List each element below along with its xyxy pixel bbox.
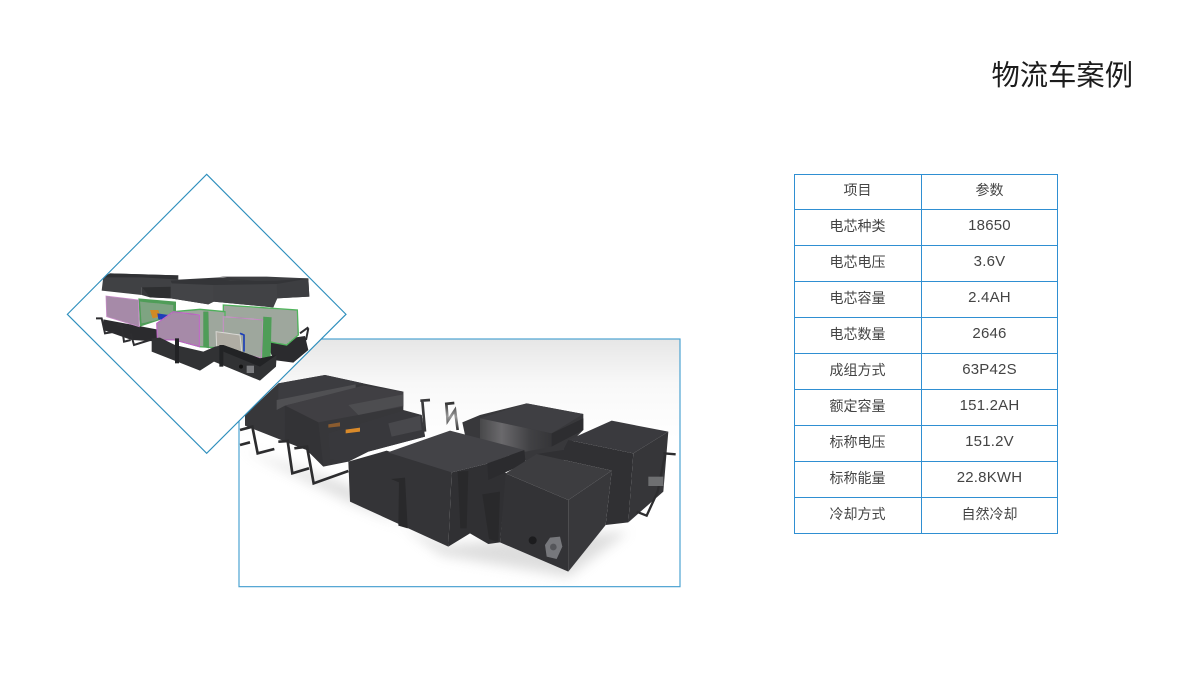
straps: [392, 478, 500, 542]
specification table: 标称电压: [830, 434, 886, 450]
photo: assembled battery packs: [239, 339, 680, 587]
left pack group: [240, 375, 458, 483]
specification table: 2646: [972, 325, 1007, 342]
specification table: [794, 174, 1058, 534]
title: 物流车案例: [992, 59, 1133, 91]
cell boards: [106, 296, 298, 358]
rear base and brackets: [96, 318, 308, 363]
specification table: 参数: [976, 182, 1004, 198]
specification table: 电芯种类: [830, 218, 886, 234]
specification table: 63P42S: [962, 361, 1017, 378]
connector: [529, 536, 537, 544]
specification table: 2.4AH: [968, 289, 1011, 306]
brackets: [240, 427, 348, 483]
specification table: 自然冷却: [962, 506, 1018, 522]
specification table: 标称能量: [830, 470, 886, 486]
specification table: 151.2AH: [960, 397, 1019, 414]
specification table: 冷却方式: [830, 506, 886, 522]
specification table: 电芯容量: [830, 290, 886, 306]
top lids: [102, 273, 309, 307]
diamond inset: exploded battery view: [67, 174, 346, 453]
specification table: 成组方式: [830, 362, 886, 378]
specification table: 项目: [844, 182, 872, 198]
specification table: 电芯电压: [830, 254, 886, 270]
diamond outline: [67, 174, 346, 453]
front pack group: [348, 431, 612, 572]
specification table: 18650: [968, 217, 1011, 234]
photo frame: [239, 339, 680, 587]
back right pack group: [462, 403, 676, 525]
specification table: 电芯数量: [830, 326, 886, 342]
front base: [152, 338, 277, 381]
specification table: 3.6V: [974, 253, 1005, 270]
specification table: 22.8KWH: [957, 469, 1022, 486]
specification table: 151.2V: [965, 433, 1014, 450]
specification table: 额定容量: [830, 398, 886, 414]
product images: [66, 174, 681, 588]
